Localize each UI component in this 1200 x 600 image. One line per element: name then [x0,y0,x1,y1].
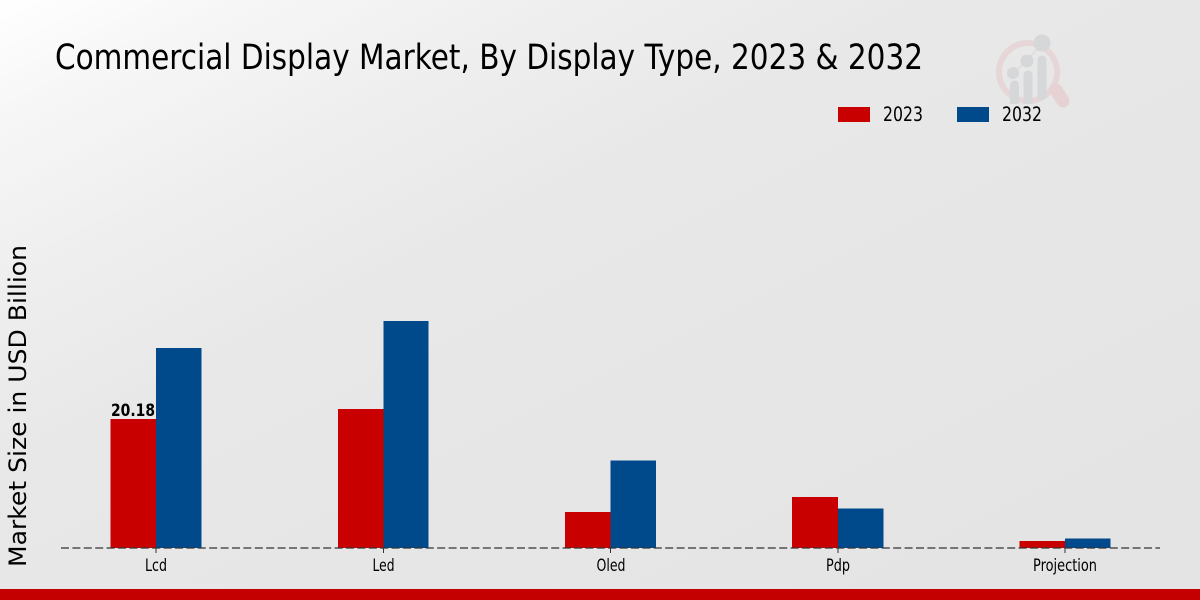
legend item: 2032 [957,103,1042,126]
icon: watermark logo [999,34,1063,104]
bars: Oled [565,460,656,548]
x axis labels: Projection [1033,556,1097,575]
tick marks [156,548,1065,553]
bars: Lcd [110,348,202,548]
baseline [61,547,1160,549]
value label: 20.18: 20.18 [111,401,155,420]
x axis labels: Led [372,556,394,575]
x axis labels: Oled [596,556,626,575]
x axis labels [145,556,1097,575]
bars: Led [338,321,428,548]
x axis labels: Pdp [826,556,850,575]
legend item: 2023: 2023 [883,103,923,126]
legend item: 2023 [838,103,923,126]
x axis labels: Lcd [145,556,167,575]
title: Commercial Display Market, By Display Type, 2023 & 2032 [55,38,923,78]
bars: Projection [1020,538,1110,548]
footer bar [0,589,1200,600]
legend [838,103,1042,126]
y axis label: Market Size in USD Billion [4,245,32,567]
bar chart [61,321,1160,575]
bars: Pdp [792,497,884,548]
legend item: 2032: 2032 [1002,103,1042,126]
